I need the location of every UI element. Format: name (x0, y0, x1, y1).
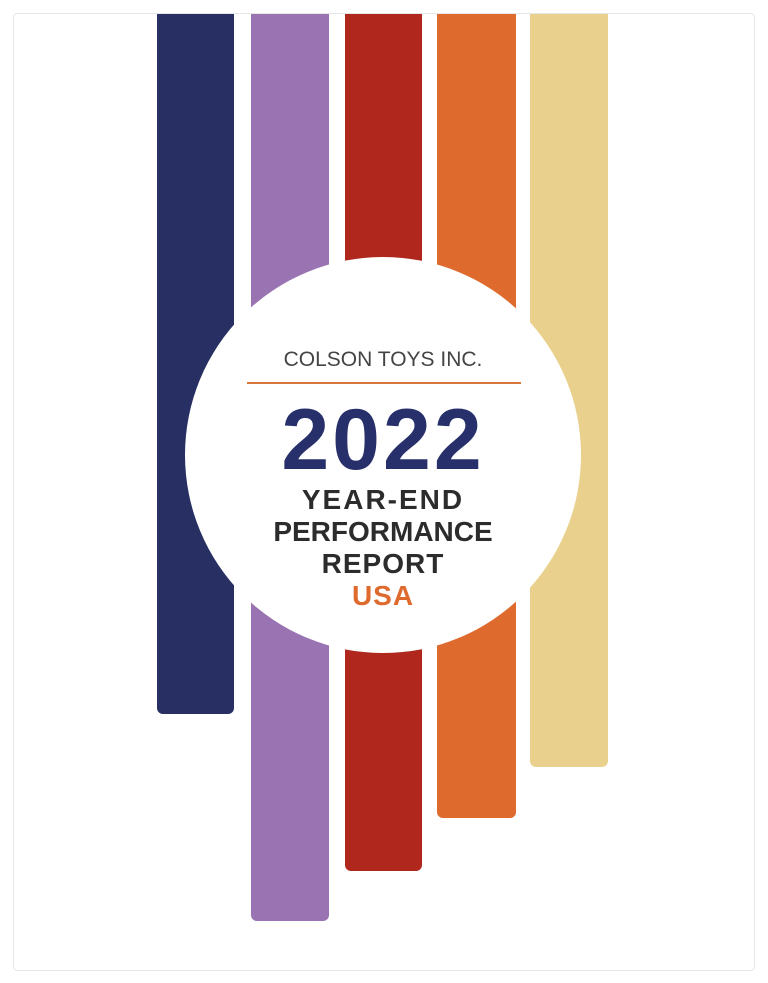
title circle (185, 257, 581, 653)
divider line (247, 382, 521, 384)
bar: yellow (530, 14, 608, 767)
bar: purple (251, 14, 329, 921)
bar: orange (437, 14, 516, 818)
report title (273, 484, 493, 579)
report title: PERFORMANCE (273, 516, 493, 547)
country: USA (352, 580, 414, 611)
bar: navy (157, 14, 234, 714)
company name: COLSON TOYS INC. (284, 348, 482, 371)
report title: REPORT (322, 548, 444, 579)
report title: YEAR-END (302, 484, 464, 515)
bar: red (345, 14, 422, 871)
year: 2022 (281, 392, 485, 488)
